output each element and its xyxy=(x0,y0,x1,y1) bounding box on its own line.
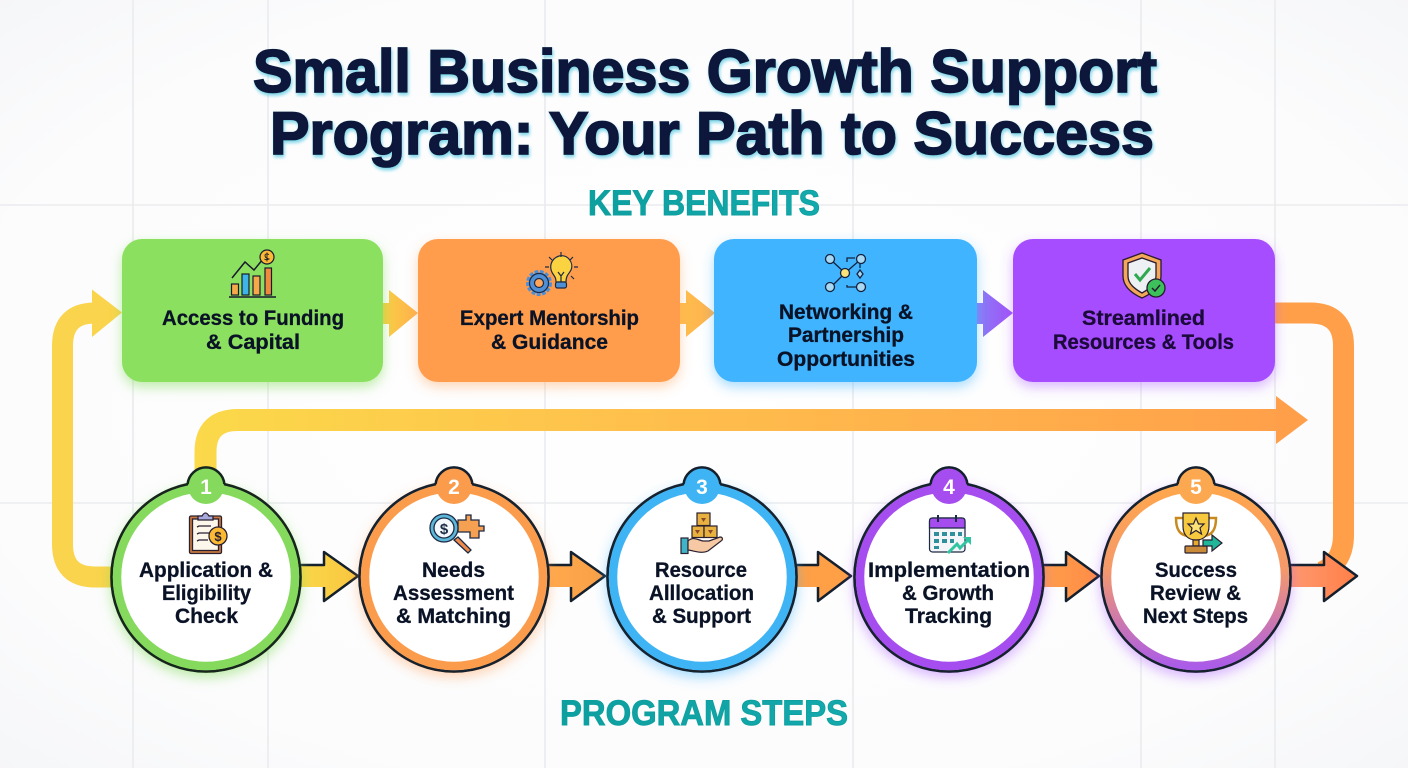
panel: expert mentorship xyxy=(418,239,680,382)
icon: clipboard with coin: $ xyxy=(214,529,222,544)
badge 2 xyxy=(436,467,472,504)
step 1: application: Eligibility xyxy=(162,582,251,605)
panel: access to funding: & Capital xyxy=(206,331,300,354)
heading: program steps: PROGRAM STEPS xyxy=(560,694,848,733)
badge 5 xyxy=(1178,467,1214,504)
arrow: step 2 to step 3 xyxy=(546,552,605,601)
arrow: right loop from benefit 4 to step 5 xyxy=(1275,313,1344,572)
title: Small Business Growth Support xyxy=(253,38,1157,105)
icon: trophy with arrow xyxy=(1176,513,1222,553)
step 4: implementation: & Growth xyxy=(902,582,994,605)
badge 3: 3 xyxy=(696,476,708,499)
arrow: benefit 1 to benefit 2 xyxy=(383,290,418,337)
arrow: left loop from step 1 to benefit 1 xyxy=(62,290,122,577)
panel: networking xyxy=(714,239,977,382)
badge 4 xyxy=(931,467,967,504)
step 4: implementation xyxy=(854,467,1044,672)
step 4: implementation: Implementation xyxy=(868,559,1030,582)
arrow: benefit 3 to benefit 4 xyxy=(977,290,1013,337)
step 3: resource allocation xyxy=(608,467,796,672)
step 4: implementation: Tracking xyxy=(905,605,992,628)
panel: networking: Networking & xyxy=(779,301,913,324)
arrow: step 3 to step 4 xyxy=(794,552,851,601)
step 1: application: Application & xyxy=(139,559,273,582)
icon: calendar with growth arrow xyxy=(930,515,971,553)
icon: bar chart with coin xyxy=(229,250,276,297)
arrow: benefit 2 to benefit 3 xyxy=(680,290,715,337)
badge 1 xyxy=(188,467,224,504)
icon: network nodes xyxy=(826,254,866,292)
step 5: success review xyxy=(1102,467,1290,672)
heading: key benefits: KEY BENEFITS xyxy=(588,184,820,223)
step 3: resource allocation: Resource xyxy=(655,559,747,582)
panel: streamlined resources: Streamlined xyxy=(1082,307,1205,330)
step 2: needs assessment: Needs xyxy=(422,559,485,582)
badge 5: 5 xyxy=(1190,476,1202,499)
icon: hand holding boxes xyxy=(681,513,722,554)
step 5: success review: Next Steps xyxy=(1143,605,1248,628)
title xyxy=(253,38,1157,167)
panel: expert mentorship: Expert Mentorship xyxy=(460,307,639,330)
icon: gear and light bulb xyxy=(528,252,578,294)
panel: expert mentorship: & Guidance xyxy=(491,331,608,354)
step 1: application xyxy=(112,467,300,672)
step 3: resource allocation: Alllocation xyxy=(649,582,754,605)
panel: streamlined resources xyxy=(1013,239,1275,382)
panel: access to funding: Access to Funding xyxy=(162,307,344,330)
panel: streamlined resources: Resources & Tools xyxy=(1053,331,1234,354)
badge 2: 2 xyxy=(448,476,460,499)
badge 3 xyxy=(684,467,720,504)
title: Program: Your Path to Success xyxy=(270,100,1154,167)
arrow: step 1 to step 2 xyxy=(298,552,358,601)
step 5: success review: Success xyxy=(1155,559,1237,582)
step 2: needs assessment: Assessment xyxy=(393,582,514,605)
step 2: needs assessment: & Matching xyxy=(396,605,511,628)
step 2: needs assessment xyxy=(360,467,548,672)
step 3: resource allocation: & Support xyxy=(652,605,751,628)
panel: networking: Partnership xyxy=(788,324,904,347)
step 1: application: Check xyxy=(175,605,238,628)
arrow: step 5 exit xyxy=(1288,552,1357,601)
panel: access to funding xyxy=(122,239,383,382)
icon: clipboard with coin xyxy=(190,513,227,554)
panel: networking: Opportunities xyxy=(777,348,915,371)
arrow: step 4 to step 5 xyxy=(1041,552,1099,601)
icon: shield with check xyxy=(1123,253,1165,298)
arrow: long path from step 1 to right xyxy=(206,396,1308,480)
badge 1: 1 xyxy=(200,476,212,499)
badge 4: 4 xyxy=(943,476,955,499)
icon: magnifier and puzzle: $ xyxy=(440,521,449,538)
icon: magnifier and puzzle xyxy=(430,514,484,553)
step 5: success review: Review & xyxy=(1150,582,1241,605)
